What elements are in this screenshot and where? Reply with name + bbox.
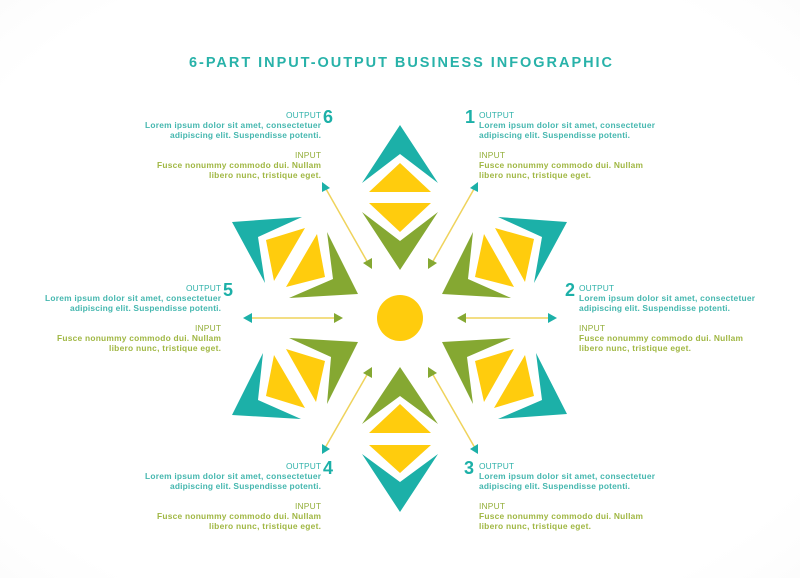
text block 5: 5	[223, 280, 233, 300]
text block 3: libero nunc, tristique eget.	[479, 521, 591, 531]
text block 4: INPUT	[295, 501, 321, 511]
text block 2: Lorem ipsum dolor sit amet, consectetuer	[579, 293, 756, 303]
text block 5: OUTPUT	[186, 283, 221, 293]
arrow: segment 4	[322, 367, 372, 454]
text block 1: INPUT	[479, 150, 505, 160]
petal: upper left	[232, 217, 358, 298]
text block 5: INPUT	[195, 323, 221, 333]
text block 2: Fusce nonummy commodo dui. Nullam	[579, 333, 743, 343]
text block 1: 1	[465, 107, 475, 127]
text block 6: libero nunc, tristique eget.	[209, 170, 321, 180]
text block 3: OUTPUT	[479, 461, 514, 471]
text block 3	[464, 458, 656, 531]
text block 4: libero nunc, tristique eget.	[209, 521, 321, 531]
text block 3: adipiscing elit. Suspendisse potenti.	[479, 481, 630, 491]
petal: top	[362, 125, 438, 270]
text block 3: Fusce nonummy commodo dui. Nullam	[479, 511, 643, 521]
text block 1: libero nunc, tristique eget.	[479, 170, 591, 180]
title: 6-PART INPUT-OUTPUT BUSINESS INFOGRAPHIC	[189, 55, 613, 71]
text block 1	[465, 107, 656, 180]
petal: bottom	[362, 367, 438, 512]
text block 6: OUTPUT	[286, 110, 321, 120]
text block 4	[145, 458, 333, 531]
petal: lower left	[232, 338, 358, 419]
text block 4: Fusce nonummy commodo dui. Nullam	[157, 511, 321, 521]
text block 1: Fusce nonummy commodo dui. Nullam	[479, 160, 643, 170]
text block 2	[565, 280, 756, 353]
text block 4: adipiscing elit. Suspendisse potenti.	[170, 481, 321, 491]
text block 5: adipiscing elit. Suspendisse potenti.	[70, 303, 221, 313]
text block 6	[145, 107, 333, 180]
text block 5	[45, 280, 233, 353]
text block 5: Lorem ipsum dolor sit amet, consectetuer	[45, 293, 222, 303]
text block 5: libero nunc, tristique eget.	[109, 343, 221, 353]
arrow: segment 2	[457, 313, 557, 323]
center circle	[377, 295, 423, 341]
arrow: segment 6	[322, 182, 372, 269]
text block 6: adipiscing elit. Suspendisse potenti.	[170, 130, 321, 140]
text block 2: INPUT	[579, 323, 605, 333]
text block 6: Fusce nonummy commodo dui. Nullam	[157, 160, 321, 170]
text block 1: OUTPUT	[479, 110, 514, 120]
text block 2: OUTPUT	[579, 283, 614, 293]
text block 3: Lorem ipsum dolor sit amet, consectetuer	[479, 471, 656, 481]
petal: upper right	[442, 217, 567, 298]
text block 4: 4	[323, 458, 333, 478]
text block 5: Fusce nonummy commodo dui. Nullam	[57, 333, 221, 343]
text block 2: libero nunc, tristique eget.	[579, 343, 691, 353]
petal: lower right	[442, 338, 567, 419]
text block 1: Lorem ipsum dolor sit amet, consectetuer	[479, 120, 656, 130]
text block 6: INPUT	[295, 150, 321, 160]
text block 6: 6	[323, 107, 333, 127]
text block 2: 2	[565, 280, 575, 300]
text block 2: adipiscing elit. Suspendisse potenti.	[579, 303, 730, 313]
text block 3: INPUT	[479, 501, 505, 511]
arrow: segment 1	[428, 182, 478, 269]
arrow: segment 3	[428, 367, 478, 454]
text block 6: Lorem ipsum dolor sit amet, consectetuer	[145, 120, 322, 130]
text block 1: adipiscing elit. Suspendisse potenti.	[479, 130, 630, 140]
text block 4: OUTPUT	[286, 461, 321, 471]
text block 3: 3	[464, 458, 474, 478]
text block 4: Lorem ipsum dolor sit amet, consectetuer	[145, 471, 322, 481]
arrow: segment 5	[243, 313, 343, 323]
